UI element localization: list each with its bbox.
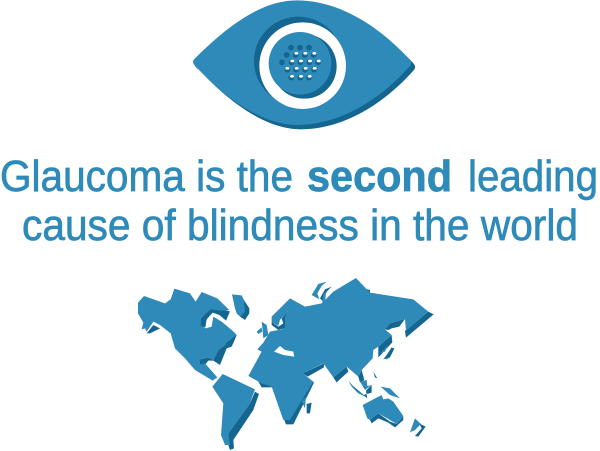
Arctic islands bbox=[312, 282, 327, 299]
Mediterranean bbox=[274, 346, 294, 357]
iris dots bbox=[279, 45, 321, 80]
title bbox=[0, 152, 598, 250]
South America bbox=[212, 374, 255, 445]
map shadows bbox=[147, 287, 434, 450]
New Zealand bbox=[410, 418, 421, 432]
Eurasia and Africa bbox=[248, 278, 428, 420]
Greenland bbox=[232, 294, 245, 317]
title: Glaucoma is the bbox=[0, 152, 293, 201]
world map bbox=[138, 278, 434, 450]
Southeast Asian islands bbox=[348, 381, 367, 397]
Madagascar bbox=[302, 397, 306, 408]
North America bbox=[138, 289, 237, 381]
Sea of Okhotsk shadow bbox=[385, 319, 405, 330]
title: second bbox=[307, 152, 452, 201]
British Isles bbox=[257, 327, 262, 334]
Japan bbox=[380, 345, 388, 353]
icon: eye bbox=[193, 0, 415, 129]
Australia bbox=[363, 395, 403, 424]
